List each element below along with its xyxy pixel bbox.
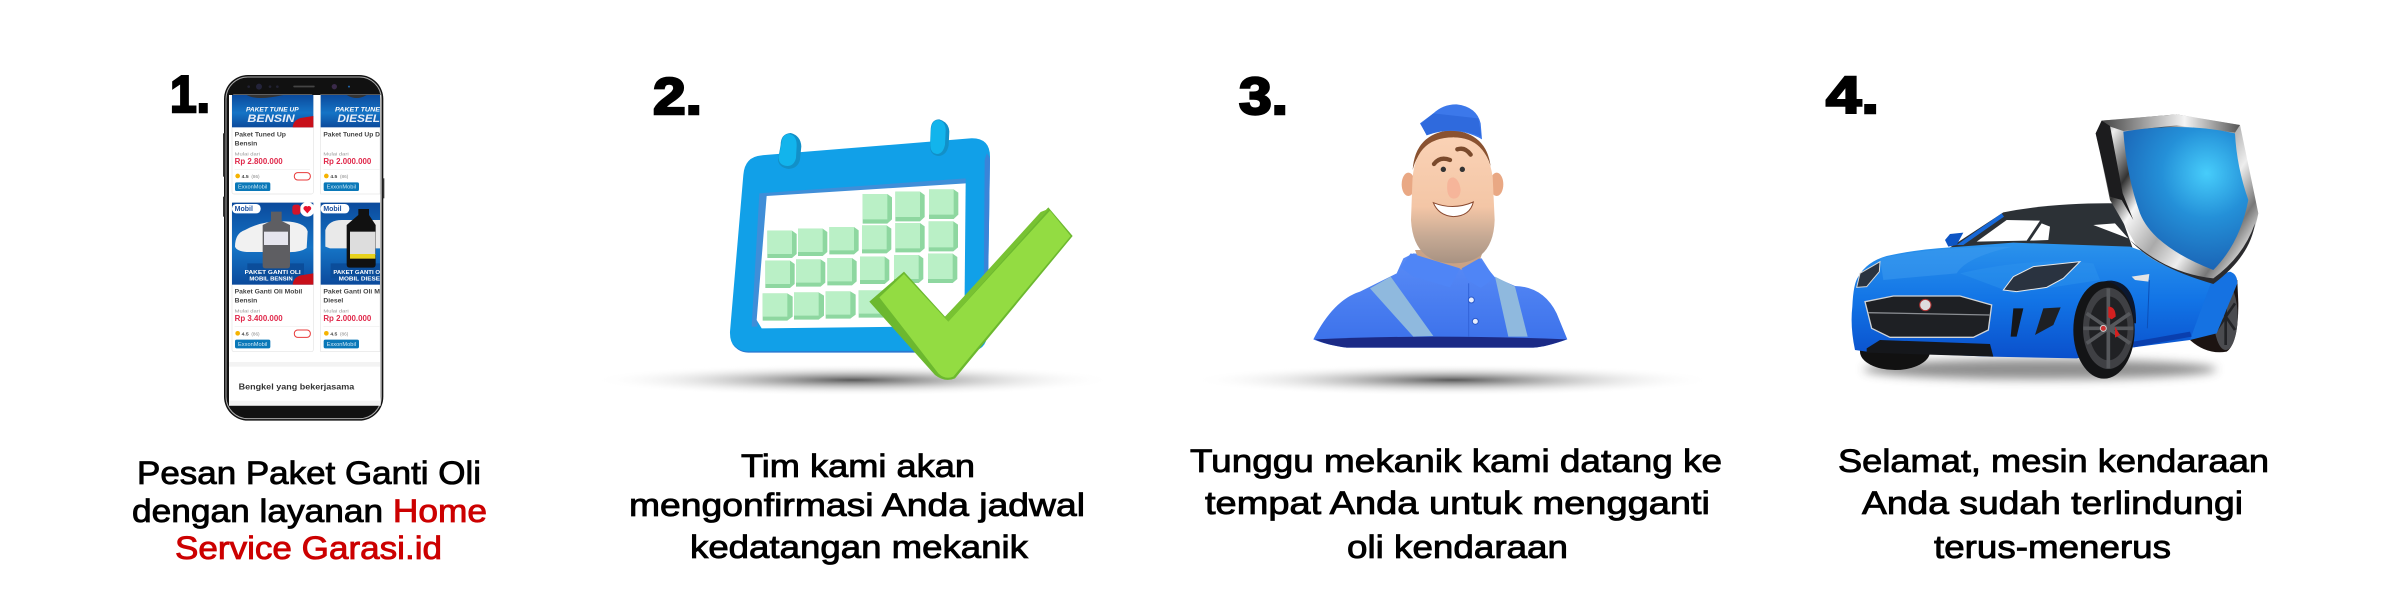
product card: oil bensin: 4.5 bbox=[242, 331, 249, 337]
product card: oil bensin: MOBIL BENSIN bbox=[249, 277, 293, 283]
ground shadow bbox=[591, 364, 1115, 396]
caption: step 1: Pesan Paket Ganti Oli bbox=[137, 455, 481, 491]
car body bbox=[1852, 243, 2213, 358]
caption: step 3 bbox=[1190, 443, 1722, 565]
calendar binder rings bbox=[778, 119, 949, 169]
product card: oil diesel: MOBIL DIESE bbox=[339, 277, 380, 283]
car roof and windows bbox=[1950, 203, 2133, 250]
product card: tune up diesel: Paket Tuned Up D bbox=[323, 132, 380, 139]
product card: oil diesel bbox=[321, 203, 381, 352]
cap bbox=[1420, 104, 1482, 139]
product card: tune up bensin: Mulai dari bbox=[235, 151, 260, 157]
rear wheel bbox=[2190, 280, 2238, 352]
caption: step 4 bbox=[1838, 443, 2269, 565]
product card: tune up bensin: Paket Tuned Up bbox=[235, 132, 286, 139]
smile bbox=[1433, 202, 1473, 217]
caption: step 2: Tim kami akan bbox=[741, 448, 975, 484]
calendar day cells bbox=[763, 189, 958, 321]
hair bbox=[1413, 130, 1491, 170]
product card: tune up diesel: 4.5 bbox=[330, 174, 337, 180]
product card: tune up bensin: PAKET TUNE UP bbox=[246, 106, 299, 113]
panel: step 1 order package bbox=[132, 66, 487, 566]
step number 1: 1. bbox=[170, 66, 210, 124]
wheel arch bbox=[2079, 281, 2136, 323]
product card: tune up diesel bbox=[321, 95, 381, 194]
caption: step 3: oli kendaraan bbox=[1347, 529, 1568, 565]
ground shadow bbox=[1191, 364, 1715, 396]
product card: tune up bensin: Rp 2.800.000 bbox=[235, 157, 283, 166]
product card: oil bensin: ExxonMobil bbox=[238, 342, 267, 348]
product card: oil bensin bbox=[232, 202, 315, 352]
product card: tune up diesel: DIESEL bbox=[337, 113, 380, 125]
product card: oil bensin: Bensin bbox=[235, 298, 257, 305]
caption: step 2: kedatangan mekanik bbox=[690, 529, 1029, 565]
product card: tune up bensin: ExxonMobil bbox=[238, 185, 267, 191]
caption: step 3: tempat Anda untuk mengganti bbox=[1205, 485, 1710, 521]
caption: step 2: mengonfirmasi Anda jadwal bbox=[629, 487, 1085, 523]
ears bbox=[1402, 173, 1415, 196]
grille bbox=[1865, 296, 1992, 337]
nose bbox=[1447, 177, 1461, 199]
front left tyre bbox=[1860, 333, 1930, 370]
panel: step 4 protected engine bbox=[1826, 67, 2269, 565]
product card: oil diesel: ExxonMobil bbox=[327, 342, 356, 348]
caption: step 4: Selamat, mesin kendaraan bbox=[1838, 443, 2269, 479]
torso with shirt bbox=[1313, 253, 1567, 348]
panel: step 2 schedule confirmation bbox=[591, 68, 1115, 565]
green check mark bbox=[869, 207, 1073, 380]
neck bbox=[1415, 250, 1483, 270]
caption: step 4: terus-menerus bbox=[1934, 529, 2171, 565]
front wheel bbox=[2073, 281, 2135, 379]
product card: oil diesel: Rp 2.000.000 bbox=[323, 314, 372, 323]
product card: oil diesel: Mulai dari bbox=[323, 308, 349, 314]
workshop heading on screen: Bengkel yang bekerjasama bbox=[239, 382, 355, 392]
panel: step 3 mechanic arrives bbox=[1190, 68, 1722, 565]
product card: tune up diesel: (86) bbox=[340, 174, 349, 179]
product card: oil diesel: (86) bbox=[340, 331, 349, 336]
product card: oil bensin: (86) bbox=[251, 331, 260, 336]
caption: step 2 bbox=[629, 448, 1085, 565]
illustration: smiling mechanic bbox=[1313, 104, 1567, 348]
product card: tune up bensin: (86) bbox=[251, 174, 260, 179]
mirror bbox=[1945, 233, 1963, 247]
shield bbox=[2096, 114, 2258, 284]
caption: step 4: Anda sudah terlindungi bbox=[1862, 485, 2243, 521]
product card: tune up bensin: BENSIN bbox=[247, 113, 296, 125]
icon: calendar with check mark bbox=[730, 119, 1073, 380]
head bbox=[1411, 137, 1495, 263]
product card: tune up diesel: PAKET TUNE bbox=[335, 106, 381, 113]
step number 3: 3. bbox=[1239, 68, 1288, 126]
icon: smartphone with app screen bbox=[223, 75, 384, 421]
product card: tune up diesel: Rp 2.000.000 bbox=[323, 157, 372, 166]
product card: oil diesel: Diesel bbox=[323, 298, 343, 305]
step number 2: 2. bbox=[653, 68, 702, 126]
caption: step 1 bbox=[132, 455, 487, 566]
product card: tune up bensin: 4.5 bbox=[242, 174, 249, 180]
eyebrows bbox=[1434, 159, 1450, 164]
product card: oil diesel: 4.5 bbox=[330, 331, 337, 337]
product card: oil bensin: Mobil bbox=[235, 206, 253, 213]
product card: oil bensin: Paket Ganti Oli Mobil bbox=[235, 289, 302, 296]
product card: oil bensin: PAKET GANTI OLI bbox=[245, 270, 301, 276]
product card: oil bensin: Rp 3.400.000 bbox=[235, 314, 283, 323]
product card: oil diesel: Paket Ganti Oli M bbox=[323, 289, 380, 296]
caption: step 3: Tunggu mekanik kami datang ke bbox=[1190, 443, 1722, 479]
product card: oil diesel: Mobil bbox=[323, 206, 342, 213]
product card: tune up bensin: Bensin bbox=[235, 140, 257, 147]
front splitter and vents bbox=[1867, 340, 1993, 357]
step number 4: 4. bbox=[1826, 67, 1879, 125]
shirt collar bbox=[1401, 253, 1460, 287]
product card: tune up bensin bbox=[232, 95, 313, 194]
product card: tune up diesel: ExxonMobil bbox=[327, 185, 356, 191]
product card: oil diesel: PAKET GANTI O bbox=[333, 270, 381, 276]
illustration: blue sports car with shield bbox=[1852, 114, 2258, 379]
eyes bbox=[1441, 167, 1446, 172]
caption: step 1: Service Garasi.id bbox=[175, 530, 442, 566]
car ground shadow bbox=[1863, 359, 2217, 379]
side vent bbox=[2132, 274, 2149, 282]
caption: step 1: dengan layanan Home bbox=[132, 493, 487, 529]
product card: tune up diesel: Mulai dari bbox=[323, 151, 349, 157]
product card: oil bensin: Mulai dari bbox=[235, 308, 260, 314]
headlights bbox=[1857, 262, 2080, 292]
